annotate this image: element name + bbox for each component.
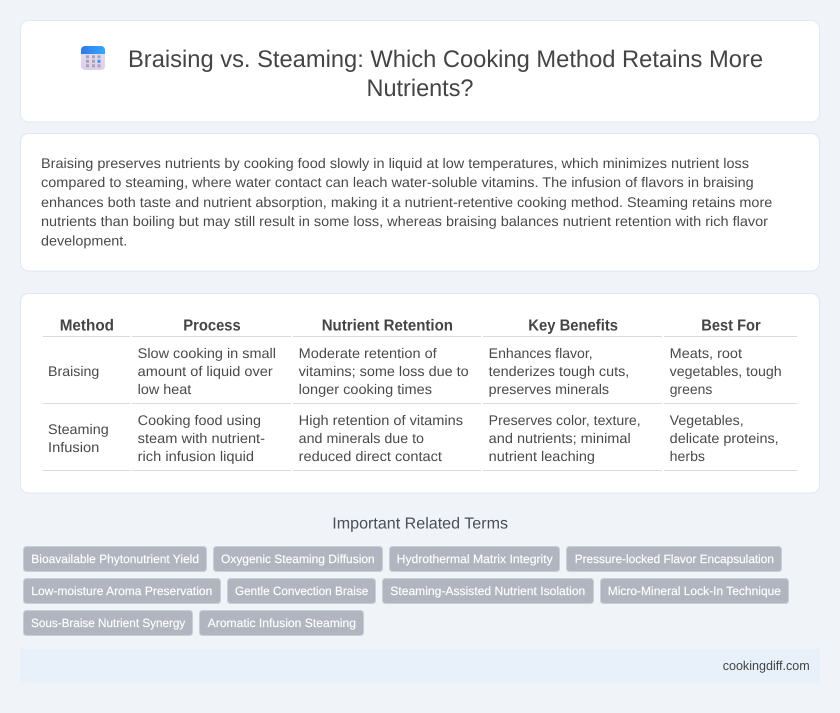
title: Braising vs. Steaming: Which Cooking Method Retains More — [128, 46, 763, 73]
table row: braising: vegetables, tough — [670, 363, 782, 379]
panel: title card — [20, 20, 820, 122]
table header row: Nutrient Retention — [322, 318, 453, 334]
table row: steaming infusion: and minerals due to — [299, 430, 424, 446]
tag list: related terms — [24, 546, 788, 636]
tag list: related terms: Gentle Convection Braise — [235, 584, 369, 598]
text block: summary: Braising preserves nutrients by cooking food slowly in liquid at low temperatures, which minimizes nutrient loss — [41, 155, 749, 171]
table row: steaming infusion — [43, 412, 797, 470]
footer: cookingdiff.com — [723, 658, 810, 673]
tag list: related terms: Micro-Mineral Lock-In Technique — [608, 584, 781, 598]
text block: summary: compared to steaming, where water contact can leach water-soluble vitamins. The infusion of flavors in braising — [41, 174, 754, 190]
title — [128, 46, 763, 102]
table row: steaming infusion: steam with nutrient- — [138, 430, 265, 446]
table row: braising: preserves minerals — [489, 381, 609, 397]
text block: summary: development. — [41, 232, 127, 248]
table row: steaming infusion: nutrient leaching — [489, 448, 595, 464]
table row: braising: tenderizes tough cuts, — [489, 363, 629, 379]
table row: steaming infusion: High retention of vitamins — [299, 412, 463, 428]
icon: calendar — [81, 46, 105, 70]
table header row — [43, 318, 797, 336]
panel: summary paragraph — [20, 134, 820, 271]
table row: steaming infusion: Infusion — [48, 439, 99, 455]
table row: steaming infusion: Cooking food using — [138, 412, 261, 428]
table row: braising: Braising — [48, 363, 99, 379]
text block: summary: enhances both taste and nutrient absorption, making it a nutrient-retentive cooking method. Steaming retains more — [41, 194, 773, 210]
table header row: Best For — [701, 318, 761, 334]
table row: braising: longer cooking times — [299, 381, 432, 397]
table header row: Key Benefits — [528, 318, 618, 334]
table row: steaming infusion: rich infusion liquid — [138, 448, 254, 464]
table row: braising: greens — [670, 381, 712, 397]
table row: steaming infusion: reduced direct contact — [299, 448, 442, 464]
tag list: related terms: Sous-Braise Nutrient Synergy — [31, 616, 185, 630]
tag list: related terms: Pressure-locked Flavor Encapsulation — [575, 552, 774, 566]
tag list: related terms: Low-moisture Aroma Preservation — [31, 584, 212, 598]
table row: braising: Moderate retention of — [299, 345, 437, 361]
table row: steaming infusion: Preserves color, texture, — [489, 412, 641, 428]
tag list: related terms: Oxygenic Steaming Diffusion — [221, 552, 375, 566]
table row: braising: Slow cooking in small — [138, 345, 276, 361]
table header row: Method — [60, 318, 114, 334]
table header row: Process — [183, 318, 241, 334]
table row: braising: Enhances flavor, — [489, 345, 593, 361]
tag list: related terms: Aromatic Infusion Steaming — [208, 616, 356, 630]
table row: steaming infusion: and nutrients; minimal — [489, 430, 631, 446]
tag list: related terms: Hydrothermal Matrix Integrity — [397, 552, 553, 566]
table row: steaming infusion: Vegetables, — [670, 412, 744, 428]
table row: braising — [43, 345, 797, 404]
tag list: related terms: Bioavailable Phytonutrient Yield — [31, 552, 199, 566]
text block: summary: nutrients than boiling but may still result in some loss, whereas braising balances nutrient retention with rich flavor — [41, 213, 768, 229]
heading: related terms: Important Related Terms — [332, 516, 508, 532]
tag list: related terms: Steaming-Assisted Nutrient Isolation — [390, 584, 585, 598]
table row: braising: amount of liquid over — [138, 363, 273, 379]
table row: braising: low heat — [138, 381, 191, 397]
text block: summary — [41, 155, 773, 248]
table row: steaming infusion: delicate proteins, — [670, 430, 779, 446]
title: Nutrients? — [366, 75, 474, 102]
table row: braising: vitamins; some loss due to — [299, 363, 469, 379]
panel: comparison table — [20, 294, 820, 493]
table row: steaming infusion: Steaming — [48, 421, 109, 437]
table row: braising: Meats, root — [670, 345, 742, 361]
footer — [20, 649, 820, 683]
table row: steaming infusion: herbs — [670, 448, 705, 464]
